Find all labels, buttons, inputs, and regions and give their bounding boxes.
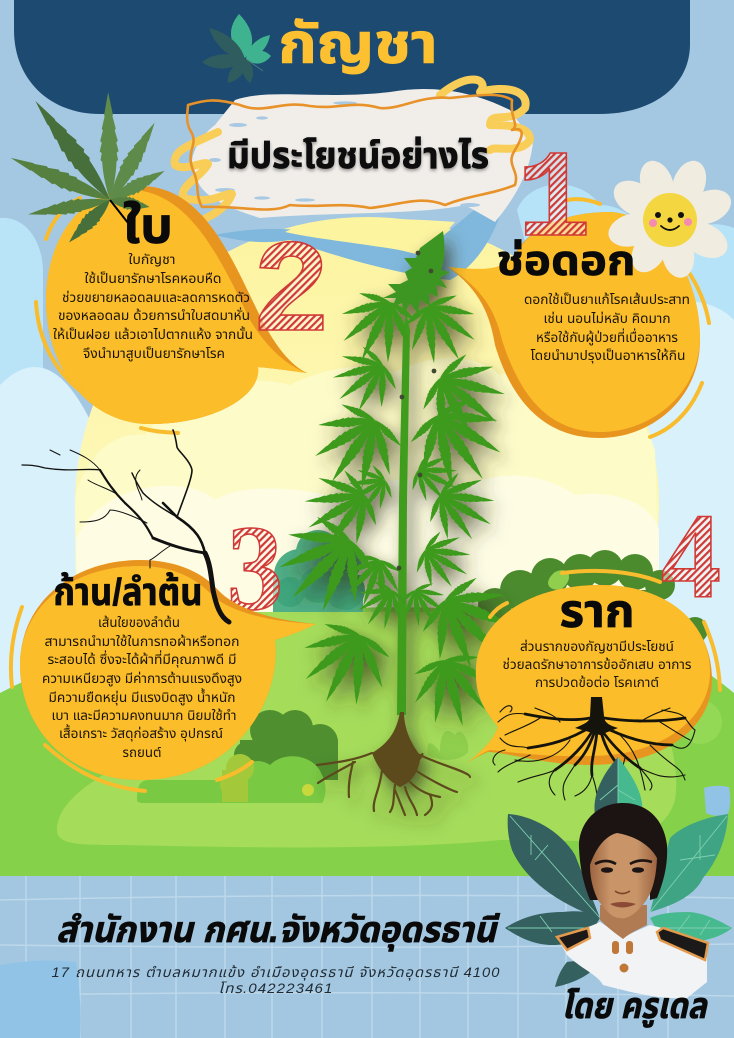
backdrop leaves (505, 757, 732, 987)
accent arcs (567, 199, 709, 437)
face (590, 833, 657, 918)
pale sun streak (285, 219, 455, 255)
seed dots (397, 251, 436, 570)
body text: มีความยืดหยุ่น มีแรงบิดสูง น้ำหนัก (48, 688, 236, 706)
header band (14, 0, 690, 114)
icon: black tree roots (493, 697, 695, 800)
bubble (46, 186, 307, 424)
leaves (256, 281, 535, 737)
body text: เส้นใยของลำต้น (98, 615, 180, 630)
body text: ของหลอดลม ด้วยการนำใบสดมาหั่น (58, 307, 250, 323)
body text (53, 252, 253, 362)
bushes behind plant (137, 530, 708, 803)
panel: bai (leaf) (7, 92, 307, 433)
heading: ราก (560, 585, 634, 637)
icon: bare branch (22, 430, 229, 622)
body text: การปวดข้อต่อ โรคเกาต์ (535, 674, 659, 690)
bubble (467, 585, 712, 765)
panel: stem (11, 430, 316, 791)
facial features (595, 860, 652, 908)
icon: large cannabis leaf (7, 92, 168, 248)
accent arcs (490, 571, 720, 690)
hair (579, 803, 667, 900)
body text: ใบกัญชา (128, 252, 176, 267)
blue brush stroke (215, 205, 500, 280)
heading: ใบ (123, 198, 173, 254)
yellow scribbles (175, 80, 530, 226)
address: โทร.042223461 (218, 980, 334, 996)
bubble (20, 560, 316, 780)
roots (317, 712, 470, 815)
heading: ช่อดอก (496, 237, 636, 284)
accent arcs (11, 607, 252, 791)
brush flecks (209, 101, 480, 207)
author credit: โดย ครูเดล (562, 985, 708, 1028)
number 1: 1 (517, 133, 591, 273)
bubble (448, 212, 700, 438)
body text: ส่วนรากของกัญชามีประโยชน์ (520, 638, 674, 654)
body text: เสื้อเกราะ วัสดุก่อสร้าง อุปกรณ์ (59, 724, 223, 742)
number 2: 2 (251, 220, 331, 370)
grid panel: footer background (0, 786, 734, 1038)
panel: cho dok (flower) (448, 156, 734, 438)
neck (600, 905, 647, 939)
subtitle banner (175, 80, 533, 280)
accent arcs (36, 198, 178, 433)
icon: title cannabis leaf (202, 14, 271, 83)
office name: สำนักงาน กศน.จังหวัดอุดรธานี (56, 909, 501, 952)
center bushes (234, 710, 338, 780)
stem (397, 312, 410, 715)
body text: ให้เป็นฝอย แล้วเอาไปตากแห้ง จากนั้น (53, 326, 253, 342)
body text: ใช้เป็นยารักษาโรคหอบหืด (84, 271, 222, 286)
body text (502, 638, 692, 690)
address: 17 ถนนทหาร ตำบลหมากแข้ง อำเมืองอุดรธานี จังหวัดอุดรธานี 4100 (52, 964, 500, 981)
sun and clouds (75, 217, 660, 793)
white brush area (192, 89, 533, 222)
flower cola (383, 231, 450, 314)
subtitle text: มีประโยชน์อย่างไร (227, 135, 489, 176)
body text: ความเหนียวสูง มีค่าการต้านแรงดึงสูง (42, 670, 242, 687)
body text: เช่น นอนไม่หลับ คิดมาก (544, 310, 670, 326)
panel: root (467, 571, 720, 800)
body text: โดยนำมาปรุงเป็นอาหารให้กิน (530, 348, 686, 364)
address (52, 964, 500, 996)
icon: smiling flower (605, 156, 734, 280)
body text: รถยนต์ (122, 745, 162, 760)
body text: ระสอบได้ ซึ่งจะได้ผ้าที่มีคุณภาพดี มี (48, 650, 236, 668)
body text: ช่วยขยายหลอดลมและลดการหดตัว (62, 289, 250, 305)
cannabis plant (256, 231, 535, 815)
number 3: 3 (227, 501, 283, 636)
number 4: 4 (661, 489, 721, 624)
hill background (0, 607, 734, 876)
body text: จึงนำมาสูบเป็นยารักษาโรค (83, 346, 225, 362)
body text: หรือใช้กับผู้ป่วยที่เบื่ออาหาร (536, 328, 678, 346)
body text (42, 615, 242, 760)
body text: เบา และมีความคงทนมาก นิยมใช้ทำ (52, 708, 236, 723)
portrait with leaf backdrop (505, 757, 732, 998)
body text: สามารถนำมาใช้ในการทอผ้าหรือทอก (44, 634, 240, 649)
body text: ดอกใช้เป็นยาแก้โรคเส้นประสาท (524, 292, 690, 307)
body text: ช่วยลดรักษาอาการข้ออักเสบ อาการ (502, 656, 692, 672)
title: กัญชา (278, 12, 438, 75)
orange wavy outline (187, 95, 522, 210)
heading: ก้าน/ลำต้น (54, 572, 202, 614)
body text (524, 292, 690, 364)
epaulettes (557, 928, 708, 972)
uniform (557, 922, 707, 998)
